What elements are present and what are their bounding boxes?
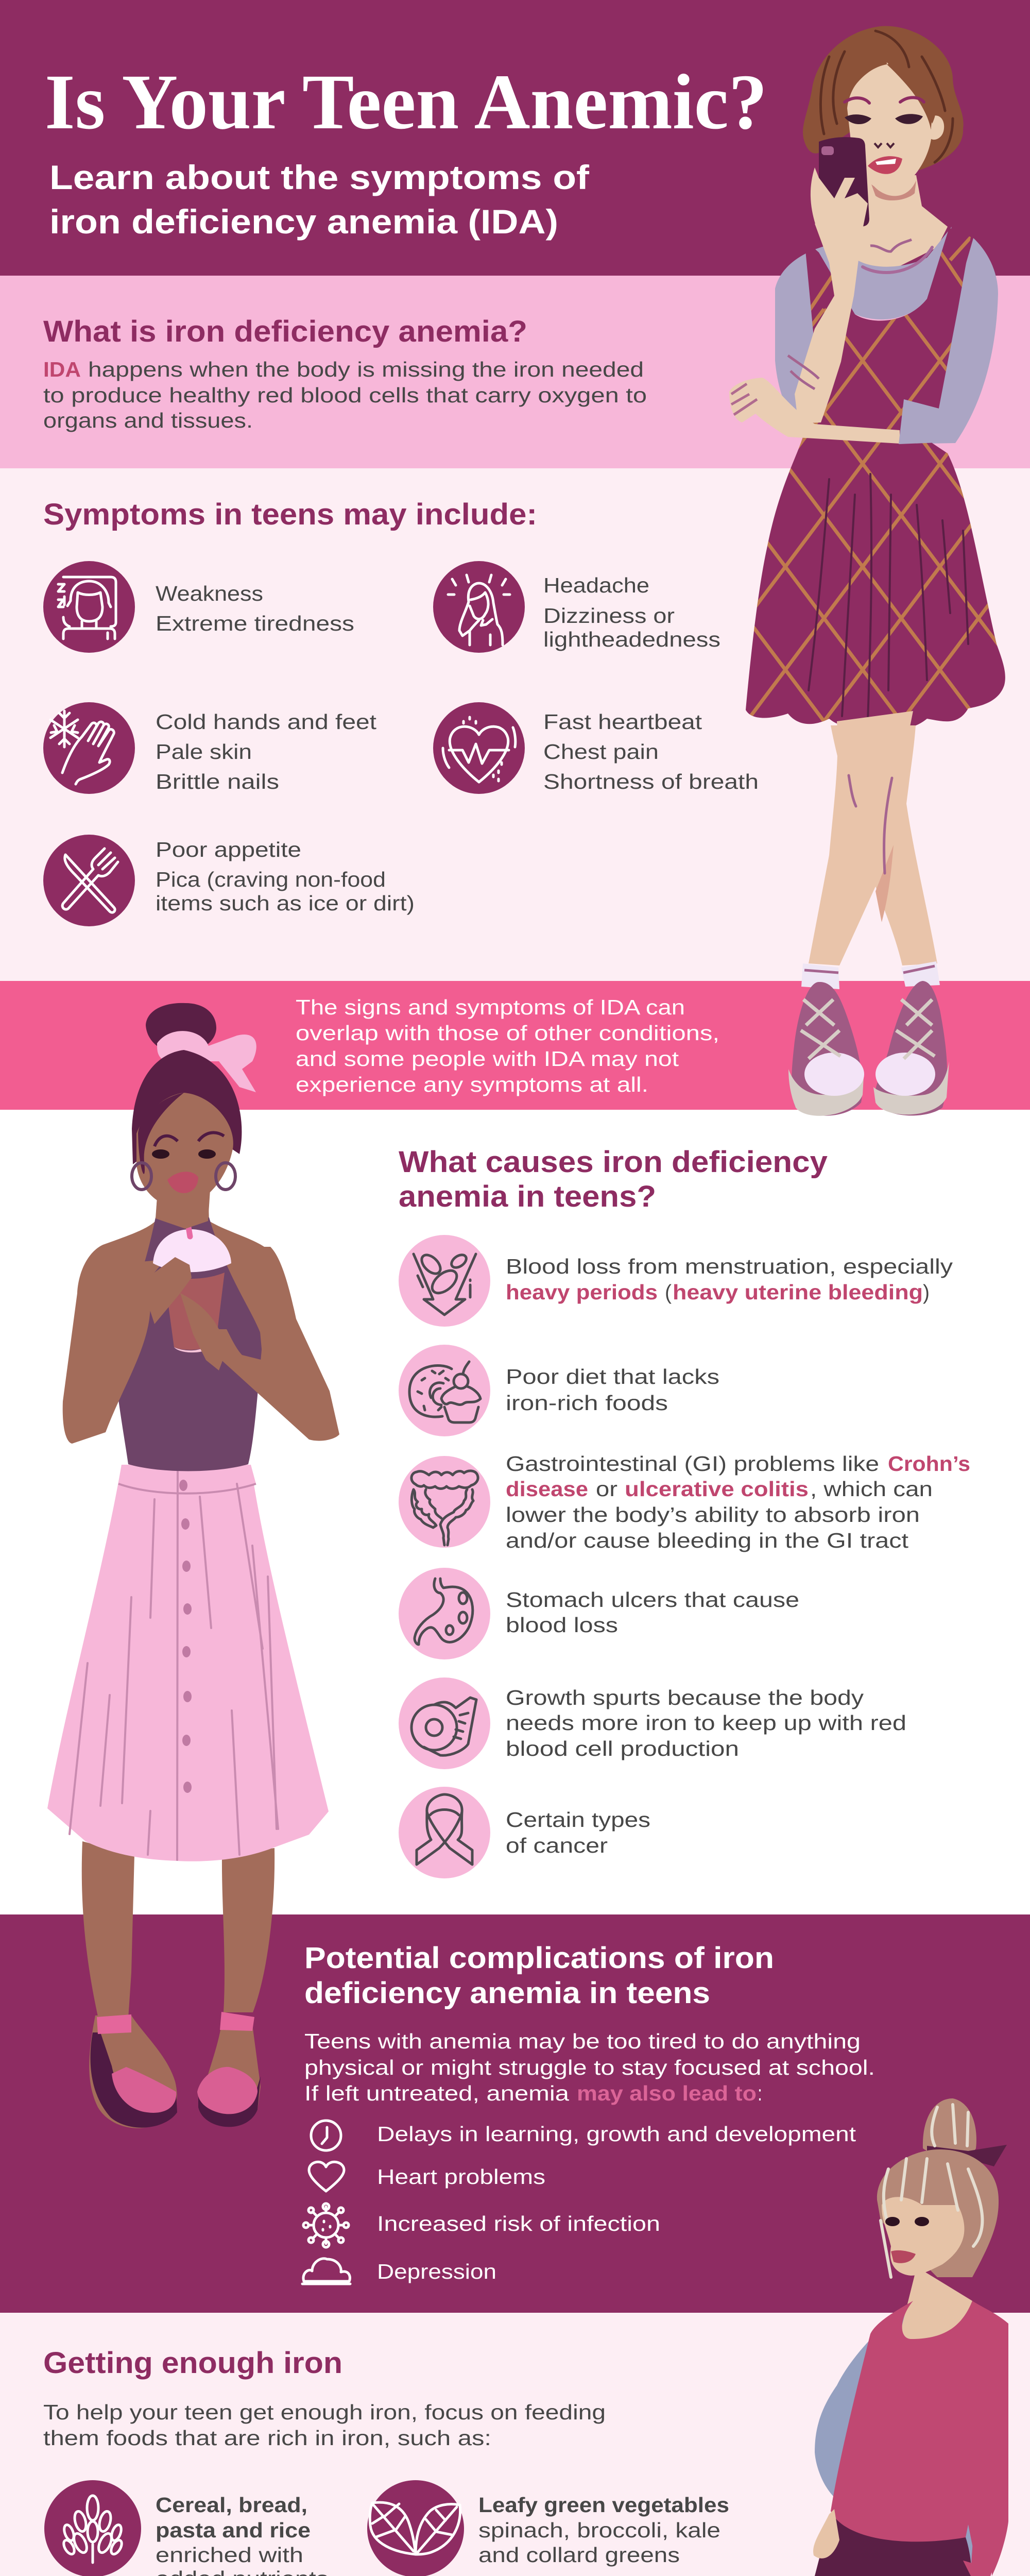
- icon: heart with pulse: [433, 702, 525, 794]
- background: header band: [0, 0, 1030, 276]
- icon: heart outline: [309, 2162, 344, 2191]
- symptom text: heartbeat: [543, 710, 759, 793]
- icon: virus: [303, 2204, 349, 2247]
- icon: measuring tape: [399, 1677, 490, 1769]
- symptom text: heartbeat: Fast heartbeat: [543, 710, 702, 734]
- definition text: happens when the body is missing the iron needed: [88, 358, 644, 381]
- heading: symptoms: Symptoms in teens may include:: [43, 498, 537, 531]
- cause text: growth spurts: needs more iron to keep up with red: [506, 1711, 906, 1735]
- cause text: GI problems: Gastrointestinal (GI) problems like: [506, 1452, 879, 1476]
- cause text: growth spurts: blood cell production: [506, 1737, 739, 1760]
- icon: cold hand: [43, 702, 135, 794]
- heading: what is IDA: What is iron deficiency anemia?: [43, 315, 527, 348]
- cause text: growth spurts: Growth spurts because the body: [506, 1686, 864, 1709]
- illustration: teen with backpack and tennis racket: [696, 2098, 1012, 2576]
- symptom text: cold hands: Pale skin: [156, 740, 252, 764]
- heading: causes: What causes iron deficiency: [399, 1145, 828, 1179]
- panel: complications: [302, 1941, 875, 2284]
- callout: overlap note: and some people with IDA may not: [296, 1047, 679, 1071]
- icon: cloud: [302, 2259, 350, 2284]
- panel: definition: [43, 315, 647, 432]
- symptom text: headache: Dizziness or: [543, 604, 675, 628]
- complications text: may also lead to: [577, 2081, 757, 2105]
- subtitle: [49, 158, 590, 241]
- item: heart problems: Heart problems: [377, 2165, 545, 2189]
- definition text: organs and tissues.: [43, 409, 253, 432]
- subtitle: Learn about the symptoms of: [49, 158, 590, 196]
- symptom text: cold hands: Cold hands and feet: [156, 710, 377, 734]
- complications text: If left untreated, anemia: [304, 2081, 569, 2105]
- cause text: cancer: Certain types: [506, 1808, 650, 1832]
- symptom text: weakness: Extreme tiredness: [156, 612, 354, 635]
- symptom text: weakness: [156, 582, 354, 635]
- food text: leafy greens: [478, 2493, 729, 2567]
- definition text: IDA: [43, 358, 81, 381]
- food text: leafy greens: Leafy green vegetables: [478, 2493, 729, 2517]
- callout: overlap note: experience any symptoms at all.: [296, 1073, 648, 1096]
- icon: donut and cupcake: [399, 1345, 490, 1436]
- food text: leafy greens: and collard greens: [478, 2543, 680, 2567]
- cause text: menstruation: Blood loss from menstruation, especially: [506, 1255, 953, 1278]
- icon: ribbon: [399, 1787, 490, 1878]
- iron intro text: them foods that are rich in iron, such as:: [43, 2426, 491, 2450]
- background: definition band: [0, 276, 1030, 468]
- cause text: GI problems: ulcerative colitis: [625, 1477, 809, 1501]
- cause text: menstruation: [506, 1255, 953, 1304]
- food text: cereal: [156, 2493, 329, 2576]
- cause text: poor diet: Poor diet that lacks: [506, 1365, 719, 1388]
- cause text: GI problems: , which can: [810, 1477, 933, 1501]
- panel: causes: [399, 1145, 970, 1878]
- icon: leaves: [367, 2480, 464, 2576]
- cause text: GI problems: lower the body’s ability to absorb iron: [506, 1503, 920, 1527]
- iron intro text: To help your teen get enough iron, focus on feeding: [43, 2400, 606, 2424]
- symptom text: cold hands: [156, 710, 377, 793]
- cause text: growth spurts: [506, 1686, 906, 1760]
- cause text: menstruation: ): [923, 1280, 930, 1304]
- food text: cereal: Cereal, bread,: [156, 2493, 307, 2517]
- heading: causes: anemia in teens?: [399, 1180, 656, 1213]
- cause text: poor diet: [506, 1365, 719, 1415]
- food text: leafy greens: spinach, broccoli, kale: [478, 2518, 720, 2542]
- cause text: cancer: [506, 1808, 650, 1857]
- subtitle: iron deficiency anemia (IDA): [49, 202, 558, 241]
- symptom text: cold hands: Brittle nails: [156, 770, 279, 793]
- cause text: ulcers: blood loss: [506, 1613, 618, 1637]
- icon: grain: [44, 2480, 141, 2576]
- cause text: GI problems: Crohn’s: [888, 1452, 970, 1476]
- icon: blood loss: [399, 1235, 490, 1327]
- item: infection: Increased risk of infection: [377, 2212, 660, 2235]
- background: causes band: [0, 1110, 1030, 1914]
- icon: headache: [433, 561, 525, 653]
- symptom text: appetite: Pica (craving non-food: [156, 868, 386, 891]
- cause text: GI problems: and/or cause bleeding in the GI tract: [506, 1529, 909, 1552]
- background: iron band: [0, 2313, 1030, 2576]
- symptom text: appetite: [156, 838, 415, 915]
- icon: tired person: [43, 561, 135, 653]
- cause text: menstruation: (: [665, 1280, 672, 1304]
- cause text: GI problems: disease: [506, 1477, 588, 1501]
- cause text: menstruation: heavy periods: [506, 1280, 658, 1304]
- icon: intestines: [399, 1456, 490, 1548]
- heading: complications: deficiency anemia in teens: [304, 1976, 710, 2010]
- item: depression: Depression: [377, 2260, 496, 2283]
- background: note band: [0, 981, 1030, 1110]
- symptom text: headache: Headache: [543, 573, 649, 597]
- definition text: [43, 358, 647, 432]
- complications text: :: [758, 2081, 762, 2105]
- symptom text: headache: [543, 573, 720, 651]
- item: delays: Delays in learning, growth and development: [377, 2122, 856, 2146]
- panel: symptoms: [43, 498, 759, 926]
- heading: complications: [304, 1941, 774, 2010]
- icon: clock: [311, 2121, 341, 2150]
- symptom text: headache: lightheadedness: [543, 628, 720, 651]
- complications text: [304, 2029, 875, 2105]
- heading: main title: Is Your Teen Anemic?: [45, 59, 767, 146]
- icon: stomach: [399, 1568, 490, 1659]
- definition text: to produce healthy red blood cells that carry oxygen to: [43, 383, 647, 407]
- heading: causes: [399, 1145, 828, 1213]
- illustration: teen with phone and plaid dress: [729, 26, 1005, 1116]
- iron intro text: [43, 2400, 606, 2450]
- food text: cereal: enriched with: [156, 2543, 303, 2567]
- symptom text: weakness: Weakness: [156, 582, 263, 605]
- background: symptoms band: [0, 468, 1030, 981]
- cause text: poor diet: iron-rich foods: [506, 1391, 668, 1415]
- cause text: cancer: of cancer: [506, 1834, 608, 1857]
- symptom text: appetite: Poor appetite: [156, 838, 301, 861]
- symptom text: heartbeat: Shortness of breath: [543, 770, 759, 793]
- cause text: ulcers: Stomach ulcers that cause: [506, 1588, 799, 1612]
- callout: overlap note: The signs and symptoms of IDA can: [296, 995, 685, 1019]
- cause text: GI problems: or: [596, 1477, 617, 1501]
- cause text: GI problems: [506, 1452, 970, 1552]
- food text: cereal: pasta and rice: [156, 2518, 311, 2542]
- callout: overlap note: [296, 995, 719, 1096]
- illustration: teen drinking a smoothie in pink skirt: [47, 1003, 339, 2128]
- cause text: ulcers: [506, 1588, 799, 1637]
- cause text: menstruation: heavy uterine bleeding: [673, 1280, 923, 1304]
- symptom text: appetite: items such as ice or dirt): [156, 891, 415, 915]
- background: complications band: [0, 1914, 1030, 2313]
- symptom text: heartbeat: Chest pain: [543, 740, 659, 764]
- heading: iron: Getting enough iron: [43, 2346, 342, 2380]
- complications text: physical or might struggle to stay focused at school.: [304, 2056, 875, 2079]
- panel: getting enough iron: [43, 2346, 786, 2576]
- icon: fork and knife: [43, 835, 135, 926]
- complications text: Teens with anemia may be too tired to do anything: [304, 2029, 861, 2053]
- callout: overlap note: overlap with those of other conditions,: [296, 1021, 719, 1045]
- heading: complications: Potential complications of iron: [304, 1941, 774, 1975]
